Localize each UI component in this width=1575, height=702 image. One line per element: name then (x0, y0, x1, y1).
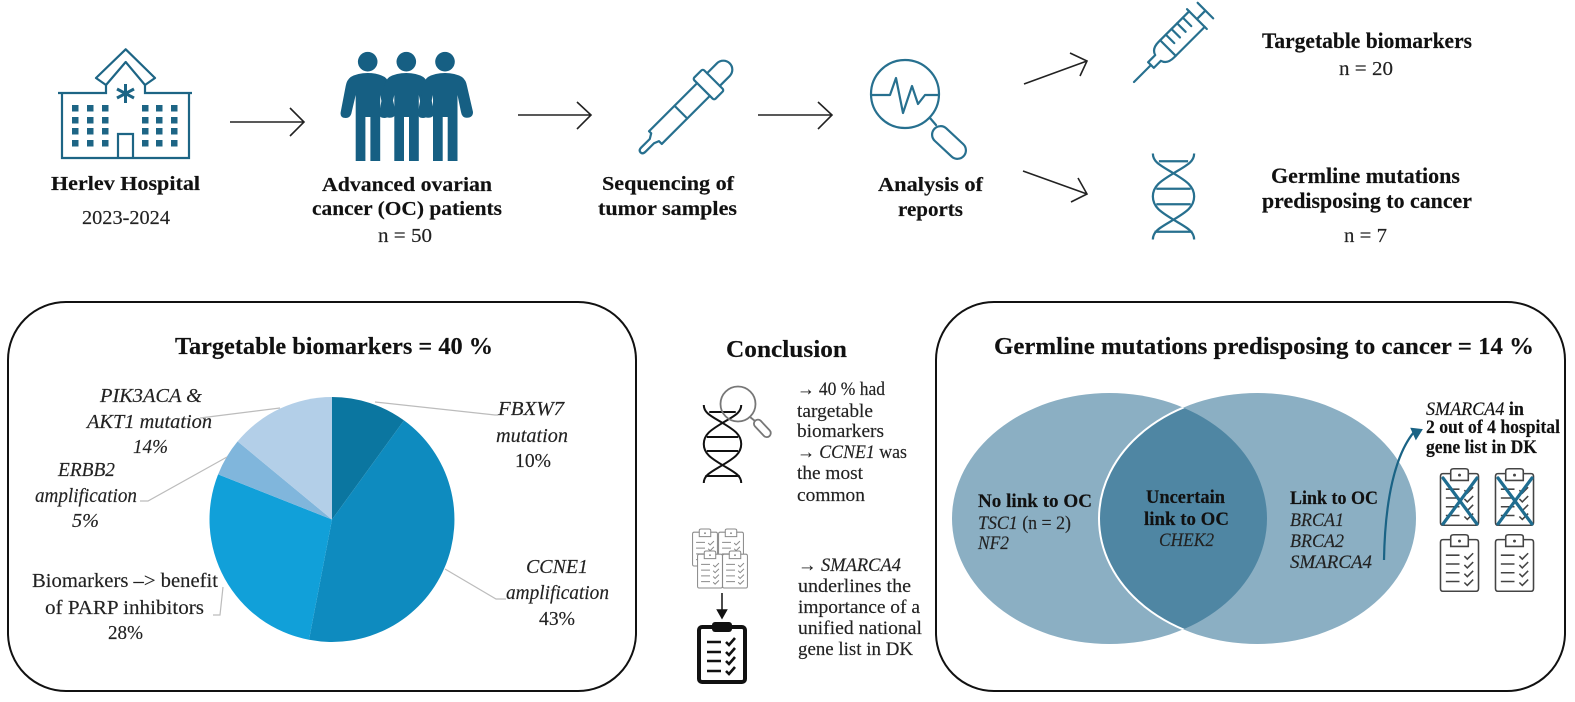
heading: patients: n = 50 (378, 225, 432, 247)
heading: targetable: n = 20 (1339, 58, 1393, 80)
label: link (1290, 489, 1378, 573)
label: PARP: 28% (108, 622, 143, 644)
label: uncertain: Uncertain (1146, 488, 1226, 508)
heading: targetable (1262, 28, 1472, 80)
label: PIK3CA (85, 385, 212, 458)
icon: black clipboard (699, 622, 745, 682)
label: ERBB2: 5% (72, 510, 99, 532)
heading: sequencing (598, 173, 737, 220)
label: PARP: of PARP inhibitors (45, 597, 204, 619)
text: conclusion one: targetable (797, 402, 873, 422)
text: conclusion one (797, 380, 907, 506)
icon: magnifier (871, 60, 969, 162)
label: FBXW7 (496, 398, 568, 472)
label: link: SMARCA4 (1290, 553, 1372, 573)
heading: sequencing: Sequencing of (602, 173, 734, 195)
label: PARP: Biomarkers –> benefit (32, 570, 218, 592)
text: SMARCA4 callout (1426, 400, 1560, 458)
heading: Herlev Hospital: 2023-2024 (82, 207, 170, 229)
pie chart (210, 397, 454, 642)
heading: germline: n = 7 (1344, 225, 1387, 247)
heading: sequencing: tumor samples (598, 198, 737, 220)
label: PIK3CA: 14% (133, 436, 168, 458)
heading: Herlev Hospital (51, 173, 200, 229)
label: PARP (32, 570, 218, 644)
heading: Herlev Hospital: Herlev Hospital (51, 173, 200, 195)
label: PIK3CA: PIK3ACA & (99, 385, 202, 407)
heading: patients: cancer (OC) patients (312, 198, 502, 220)
text: conclusion one: the most (797, 464, 864, 484)
label: CCNE1: CCNE1 (526, 556, 588, 578)
arrow (230, 108, 304, 136)
text: conclusion one: → CCNE1 was (797, 443, 907, 463)
arrow: down (718, 593, 726, 618)
heading: patients (312, 174, 502, 247)
heading: analysis: Analysis of (878, 174, 983, 196)
heading: targetable: Targetable biomarkers (1262, 28, 1472, 53)
icon: DNA with magnifier (704, 386, 772, 483)
icon: DNA (1153, 154, 1194, 240)
venn diagram (952, 393, 1416, 644)
panel title: Targetable biomarkers = 40 % (175, 334, 493, 360)
icon: hospital (58, 49, 192, 158)
text: SMARCA4 callout: SMARCA4 in (1426, 400, 1525, 420)
label: CCNE1 (506, 556, 609, 630)
label: ERBB2 (35, 459, 137, 532)
label: CCNE1: amplification (506, 582, 609, 604)
label: uncertain (1144, 488, 1229, 551)
label: no link: TSC1 (n = 2) (978, 514, 1071, 534)
text: conclusion two: → SMARCA4 (798, 556, 901, 576)
label: FBXW7: 10% (515, 450, 551, 472)
icon: gray clipboards (693, 529, 747, 588)
text: conclusion two: importance of a (798, 598, 920, 618)
panel: germline mutations (936, 302, 1565, 691)
icon: patients (341, 52, 473, 161)
text: conclusion two: underlines the (798, 577, 911, 597)
label: ERBB2: amplification (35, 485, 137, 507)
heading: analysis (878, 174, 983, 221)
conclusion column (693, 337, 922, 682)
text: conclusion two (798, 556, 922, 660)
icon: crossed clipboards (1440, 469, 1534, 525)
label: link: BRCA1 (1290, 511, 1344, 531)
heading: germline: Germline mutations (1271, 163, 1460, 188)
label: PIK3CA: AKT1 mutation (85, 411, 212, 433)
text: SMARCA4 callout: gene list in DK (1426, 438, 1538, 458)
arrow: curved (1384, 429, 1421, 560)
label: link: Link to OC (1290, 489, 1378, 509)
leader lines (140, 402, 506, 615)
label: uncertain: link to OC (1144, 510, 1229, 530)
text: conclusion one: common (797, 486, 865, 506)
heading: conclusion: Conclusion (726, 337, 847, 363)
label: no link: No link to OC (978, 492, 1092, 512)
arrow (518, 102, 591, 129)
icon: dropper (630, 53, 740, 163)
icon: syringe (1124, 1, 1215, 92)
text: conclusion two: gene list in DK (798, 640, 914, 660)
text: conclusion one: biomarkers (797, 422, 884, 442)
label: FBXW7: FBXW7 (497, 398, 565, 420)
panel title: Germline mutations predisposing to cancer = 14 % (994, 334, 1534, 360)
arrow (1023, 171, 1087, 202)
text: conclusion one: → 40 % had (797, 380, 886, 400)
icon: clipboards (1440, 535, 1534, 591)
label: no link: NF2 (977, 534, 1009, 554)
label: no link (977, 492, 1092, 554)
heading: germline (1262, 163, 1472, 247)
label: CCNE1: 43% (539, 608, 575, 630)
label: FBXW7: mutation (496, 425, 568, 447)
text: conclusion two: unified national (798, 619, 922, 639)
arrow (758, 102, 832, 129)
text: SMARCA4 callout: 2 out of 4 hospital (1426, 418, 1560, 438)
panel: targetable biomarkers (8, 302, 636, 691)
label: uncertain: CHEK2 (1159, 531, 1214, 551)
heading: analysis: reports (898, 199, 963, 221)
label: link: BRCA2 (1290, 532, 1344, 552)
arrow (1024, 53, 1087, 84)
heading: patients: Advanced ovarian (322, 174, 492, 196)
heading: germline: predisposing to cancer (1262, 188, 1472, 213)
label: ERBB2: ERBB2 (57, 459, 115, 481)
